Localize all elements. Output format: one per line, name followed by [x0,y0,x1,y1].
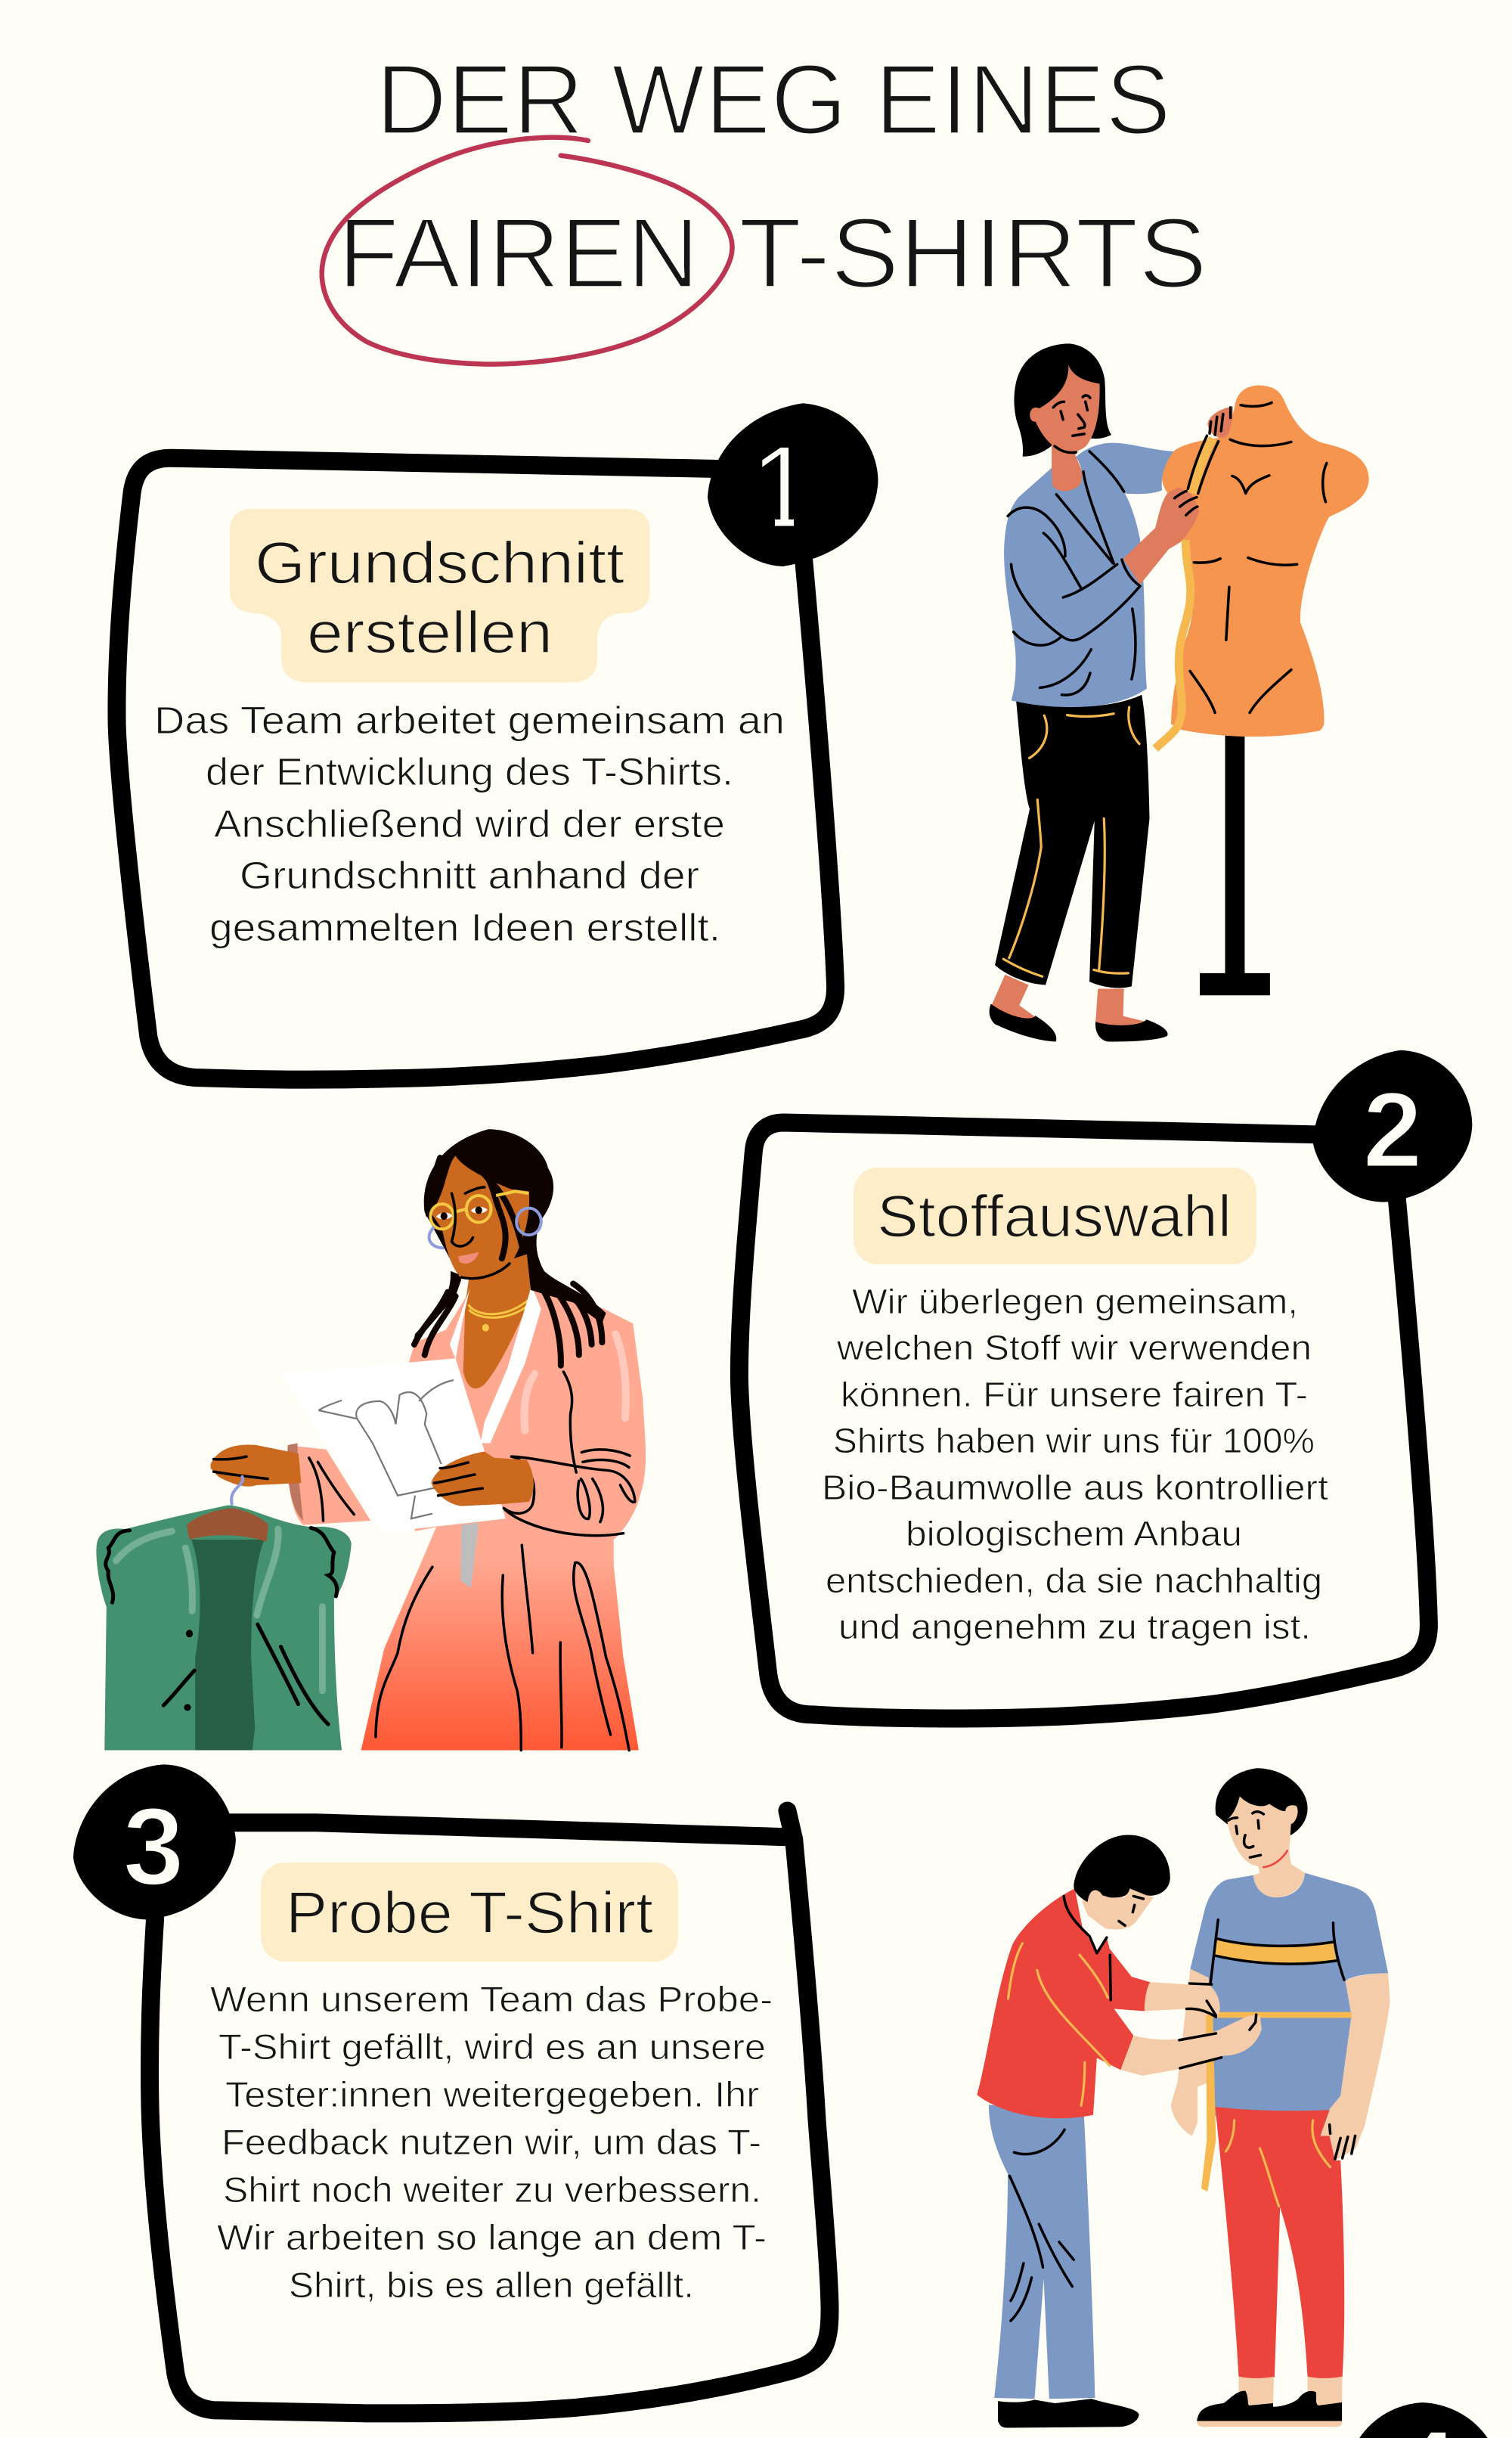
heading 1: erstellen [307,599,553,665]
tailor upper arm [1145,1982,1220,2018]
hair mass [413,1129,606,1345]
body text 3: T-Shirt gefällt, wird es an unsere [218,2027,766,2067]
tailor head [1082,1888,1154,1930]
heading highlight 2 [854,1168,1256,1264]
tailor hair [1074,1835,1170,1902]
body text 3: Shirt, bis es allen gefällt. [289,2265,694,2305]
shirt lines [1210,1920,1344,1984]
pupils [441,1206,482,1220]
sole [1197,2421,1342,2427]
panel: step 1 Grundschnitt erstellen [116,403,878,1080]
tape around waist [1201,2012,1352,2191]
face [1030,364,1100,451]
number badge 3: 3 [122,1785,184,1908]
pendant [482,1324,489,1332]
jacket lining [191,1540,265,1751]
glasses [430,1191,528,1229]
necklace [468,1298,530,1317]
heading 1 [255,529,624,665]
illustration: woman fitting a mannequin [990,343,1369,1042]
back hair [1014,343,1111,457]
number badge 4 cropped at page bottom [1346,2402,1501,2438]
customer chin line [1263,1850,1287,1867]
shoes [990,1004,1168,1042]
shirt seams [1009,1943,1110,2105]
frame 3 [150,1811,830,2413]
body text 3 [210,1979,773,2305]
hand lines and cuff [1122,491,1198,585]
trouser stitching [1225,2120,1331,2207]
title [322,44,1207,364]
shirt lines [1008,451,1140,695]
heading highlight 3 [261,1863,678,1962]
green jacket [96,1505,352,1751]
body text 3: Wir arbeiten so lange an dem T- [217,2217,767,2257]
number badge 3 [73,1764,236,1919]
panel: step 3 Probe T-Shirt [73,1764,830,2413]
dress lines [376,1372,635,1751]
customer facial features [1228,1812,1263,1857]
tailor lower arm [1120,2015,1262,2076]
tailor shirt [977,1888,1150,2118]
body text 2: können. Für unsere fairen T- [841,1375,1308,1414]
tailor facial features [1119,1896,1143,1925]
upper hand lines [1210,408,1231,435]
number badge 1: 1 [750,421,815,552]
body text 1: gesammelten Ideen erstellt. [209,906,720,949]
upper hand [1207,407,1233,438]
tailor shoes [998,2399,1139,2427]
legs [992,975,1147,1031]
body text 1: Anschließend wird der erste [214,802,725,845]
neck [1050,440,1083,492]
body text 2: welchen Stoff wir verwenden [836,1328,1312,1367]
heading 3: Probe T-Shirt [286,1879,653,1946]
red trousers [1215,2107,1344,2379]
eyes [436,1207,488,1219]
customer face and neck [1227,1796,1305,1897]
curls across the face [429,1155,523,1258]
forearm and hand [1123,488,1199,585]
body text 1 [154,699,785,949]
shirt stripe [1214,1938,1336,1964]
sleeve inner shade [287,1443,303,1521]
hanger hook [231,1477,243,1504]
mannequin stand [1200,734,1270,995]
title: FAIREN [338,197,699,309]
mannequin contour lines [1190,402,1327,712]
jacket buttons [184,1630,193,1711]
wooden hanger [187,1508,268,1542]
measuring tape [1155,438,1213,749]
body text 1: Grundschnitt anhand der [240,854,699,897]
customer hair [1216,1768,1308,1835]
body text 3: Tester:innen weitergegeben. Ihr [225,2074,759,2114]
body text 3: Shirt noch weiter zu verbessern. [223,2170,761,2210]
earrings [429,1208,541,1248]
black trousers [995,695,1150,988]
customer shoes [1197,2391,1342,2421]
nose and jaw [451,1187,510,1279]
body text 1: der Entwicklung des T-Shirts. [206,750,733,793]
heading highlight 1 [230,509,650,682]
hand holding hanger [211,1444,301,1487]
white measuring sash [450,1286,541,1443]
grey tape end [460,1523,479,1588]
collar lines [1064,1896,1111,2000]
number badge 2: 2 [1363,1070,1422,1190]
jacket highlights [116,1529,323,1691]
body text 2: und angenehm zu tragen ist. [838,1607,1311,1646]
customer right arm [1321,1973,1390,2160]
title: T-SHIRTS [739,197,1207,309]
heading 1: Grundschnitt [255,529,624,596]
jeans lines [1009,2129,1074,2321]
tape edge lines [1188,436,1219,493]
frame 1 [116,458,835,1080]
left sleeve [287,1445,370,1525]
hair locks [414,1284,602,1366]
illustration: tailor measuring a customer [977,1768,1390,2427]
facial features [1053,395,1090,453]
garment sketch [318,1380,454,1518]
jacket seams [106,1528,337,1724]
mannequin torso [1162,385,1369,737]
body text 3: Wenn unserem Team das Probe- [210,1979,773,2019]
body text 2: Wir überlegen gemeinsam, [852,1282,1298,1321]
fingers of customer [1330,2125,1356,2159]
body text 2: Shirts haben wir uns für 100% [833,1421,1315,1460]
chest skin [463,1250,531,1388]
frame 2 [739,1122,1429,1719]
face [430,1155,529,1278]
panel: step 2 Stoffauswahl [739,1050,1472,1719]
heading 2: Stoffauswahl [877,1183,1232,1249]
number badge 2 [1313,1050,1472,1202]
sleeve lines [309,1458,354,1521]
body text 1: Das Team arbeitet gemeinsam an [154,699,785,742]
customer hanging arm [1171,1968,1210,2136]
hand holding paper [431,1451,534,1506]
paper sheet [282,1358,506,1533]
hand-drawn circle around FAIREN [322,138,732,364]
finger lines [214,1456,482,1496]
lips [458,1252,479,1264]
customer blue t-shirt [1190,1873,1388,2118]
body text 3: Feedback nutzen wir, um das T- [222,2122,761,2162]
arm lines [1179,1984,1256,2068]
number badge 1 [708,403,878,566]
body text 2 [822,1282,1328,1646]
body text 2: Bio-Baumwolle aus kontrolliert [822,1468,1328,1507]
tailor jeans [989,2105,1095,2399]
title: DER WEG EINES [376,44,1171,155]
pink dress [361,1288,646,1751]
body text 2: entschieden, da sie nachhaltig [826,1561,1322,1600]
blue shirt [1004,443,1174,708]
illustration: woman with sketch and green jacket [96,1129,646,1751]
customer feet [1238,2377,1343,2405]
trouser stitching [1003,707,1139,976]
body text 2: biologischem Anbau [906,1514,1242,1553]
dress highlights [524,1334,626,1431]
